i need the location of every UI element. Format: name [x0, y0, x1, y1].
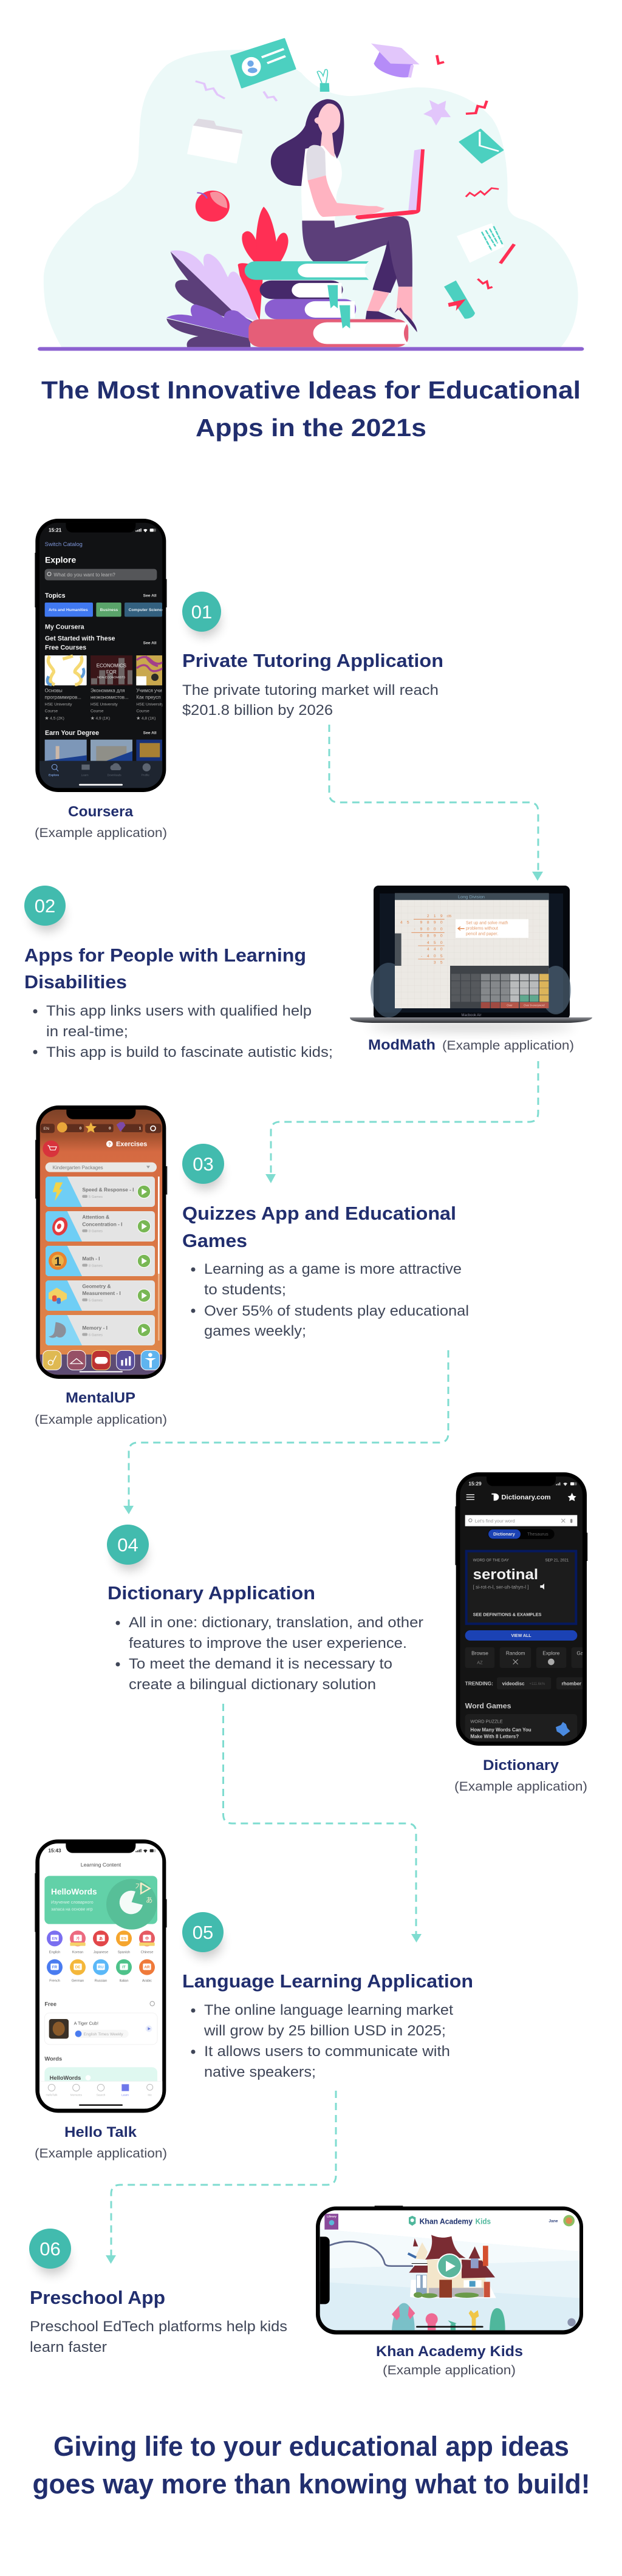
phone: MentalUP: Measurement - I — [82, 1290, 121, 1296]
phone: MentalUP: Memory - I — [82, 1325, 108, 1331]
laptop: ModMath — [350, 886, 592, 1031]
stack of books — [245, 261, 408, 347]
phone: Hello Talk: A Tiger Cub! — [74, 2020, 98, 2026]
phone: Dictionary: Explore — [542, 1650, 560, 1656]
laptop: ModMath: 9 — [434, 921, 436, 925]
phone: MentalUP: Attention & — [82, 1214, 109, 1220]
phone: Hello Talk: Spanish — [118, 1950, 130, 1954]
phone: Coursera: Profile — [142, 773, 149, 776]
icon: paper clip — [317, 69, 329, 92]
phone: Hello Talk: 15:43 — [48, 1848, 61, 1854]
laptop: ModMath: pencil and paper. — [466, 932, 498, 937]
phone: Hello Talk: RU — [98, 1966, 104, 1970]
laptop: ModMath: 9 — [420, 921, 422, 925]
badge 04 — [107, 1525, 149, 1570]
laptop: ModMath: 4 — [400, 921, 403, 925]
caption: Khan Academy Kids — [376, 2343, 523, 2377]
section 03 text: Over 55% of students play educational — [204, 1303, 469, 1319]
title: Apps in the 2021s — [196, 414, 426, 442]
phone: Coursera: Course — [136, 709, 149, 714]
phone: Hello Talk: Chinese — [141, 1950, 153, 1954]
phone: Dictionary: Make With 8 Letters? — [470, 1734, 519, 1739]
caption: MentalUP: MentalUP — [66, 1390, 135, 1406]
phone: Dictionary: Word Games — [465, 1702, 511, 1710]
phone: MentalUP — [35, 1105, 167, 1379]
phone: Coursera: Учимся учи — [136, 688, 162, 693]
badge 01: 01 — [191, 601, 212, 623]
phone: Coursera: What do you want to learn? — [53, 572, 115, 578]
phone: Coursera: Topics — [45, 592, 66, 600]
caption: Coursera: Coursera — [68, 804, 134, 820]
section 05 text: The online language learning market — [204, 2002, 453, 2018]
icon: red check — [437, 55, 444, 64]
phone: Coursera: Free Courses — [45, 644, 86, 651]
background blob — [44, 50, 578, 347]
phone: Dictionary: How Many Words Can You — [470, 1727, 531, 1733]
ground line — [38, 347, 584, 351]
phone: Hello Talk: French — [49, 1980, 60, 1983]
laptop: ModMath: 0 — [420, 934, 422, 938]
caption: MentalUP — [35, 1390, 167, 1427]
laptop: ModMath: 0 — [434, 954, 436, 958]
icon: lilac zigzags — [196, 81, 277, 101]
phone: Coursera: Основы — [45, 688, 63, 693]
woman with laptop — [271, 99, 425, 332]
laptop: ModMath: r35 — [446, 915, 451, 918]
phone: MentalUP: Geometry & — [82, 1283, 111, 1290]
phone: Coursera: Экономика для — [91, 688, 125, 693]
caption: Coursera — [35, 804, 167, 840]
phone: Coursera: See All — [143, 641, 157, 645]
section 06 text — [30, 2287, 287, 2356]
laptop: ModMath: 1 — [434, 914, 436, 918]
laptop: ModMath: 2 — [427, 914, 429, 918]
phone: Hello Talk: Learn — [121, 2094, 129, 2097]
phone: Dictionary: AZ — [477, 1659, 483, 1665]
closing statement: goes way more than knowing what to build! — [33, 2468, 590, 2499]
phone: Coursera: See All — [143, 594, 157, 598]
phone: Hello Talk: Me — [148, 2094, 152, 2097]
phone: Hello Talk: あ — [146, 1896, 152, 1904]
phone: Dictionary: WORD OF THE DAY — [473, 1559, 510, 1563]
caption: Dictionary: Dictionary — [483, 1757, 559, 1774]
phone: MentalUP: 0 — [80, 1127, 82, 1131]
caption: ModMath: (Example application) — [442, 1039, 574, 1053]
phone: MentalUP: 5 Games — [89, 1299, 103, 1302]
phone: Coursera: Explore — [45, 555, 77, 565]
laptop: ModMath: problems without — [466, 927, 498, 931]
section 01 text: Private Tutoring Application — [182, 650, 443, 671]
icon: star — [423, 100, 451, 126]
laptop: ModMath: Over 9-everyword — [524, 1004, 545, 1007]
section 05 text: It allows users to communicate with — [204, 2043, 450, 2060]
section 01 text: The private tutoring market will reach — [182, 682, 439, 699]
phone: Hello Talk: Free — [44, 2001, 56, 2007]
icon: red zigzag low — [478, 279, 493, 288]
phone: Coursera: неэкономистов... — [91, 695, 129, 700]
icon: diploma — [444, 281, 475, 319]
phone: Hello Talk — [35, 1839, 167, 2113]
phone: Coursera: NON-ECONOMISTS — [97, 676, 126, 680]
laptop: ModMath: Set up and solve math — [466, 921, 508, 926]
laptop: ModMath: 4 — [427, 954, 429, 958]
phone: Coursera: Arts and Humanities — [49, 608, 88, 612]
phone: MentalUP: 8 Games — [89, 1264, 103, 1268]
laptop: ModMath: 0 — [440, 941, 443, 945]
badge 03: 03 — [193, 1153, 214, 1175]
laptop: ModMath: 0 — [440, 928, 443, 932]
phone: Hello Talk: 中 — [145, 1935, 149, 1941]
laptop: ModMath: 5 — [407, 921, 409, 925]
phone: Dictionary: rhomber — [562, 1681, 581, 1687]
phone: Dictionary — [455, 1472, 587, 1751]
phone: MentalUP: ? — [108, 1141, 111, 1147]
phone: Dictionary: Thesaurus — [527, 1531, 549, 1537]
section 05 text — [182, 1970, 473, 2080]
laptop: ModMath: - — [414, 928, 415, 932]
laptop: ModMath: 9 — [440, 914, 443, 918]
phone: Hello Talk: Words — [44, 2055, 62, 2062]
section 02 text: Apps for People with Learning — [24, 945, 306, 966]
phone: Hello Talk: HelloWords — [51, 1887, 97, 1896]
caption: ModMath — [368, 1037, 574, 1053]
phone: MentalUP: Concentration - I — [82, 1221, 123, 1227]
phone: Hello Talk: Russian — [95, 1980, 107, 1983]
phone: Hello Talk: HelloWords — [50, 2075, 81, 2081]
arrow 01 to 02 — [329, 725, 543, 881]
phone: Coursera: Explore — [49, 773, 59, 776]
phone: Hello Talk: Изучение словарного — [51, 1901, 94, 1905]
phone: MentalUP: Kindergarten Packages — [53, 1165, 103, 1170]
section 05 text: will grow by 25 billion USD in 2025; — [203, 2023, 446, 2039]
phone: Coursera: Learn — [81, 773, 89, 776]
section 04 text: All in one: dictionary, translation, and other — [129, 1614, 423, 1631]
section 01 text — [182, 650, 443, 719]
phone: Coursera: Course — [45, 709, 58, 714]
phone: Dictionary: Dictionary.com — [501, 1494, 551, 1502]
phone: Dictionary: Dictionary — [493, 1531, 516, 1537]
phone: Dictionary: Let's find your word — [475, 1519, 515, 1524]
laptop: ModMath: - — [421, 954, 422, 958]
phone: Dictionary: VIEW ALL — [511, 1634, 531, 1638]
phone: Coursera: Downloads — [108, 773, 121, 776]
section 03 text: games weekly; — [204, 1323, 306, 1339]
caption: Dictionary — [454, 1757, 587, 1794]
phone: Hello Talk: FR — [52, 1966, 58, 1970]
icon: folder — [187, 118, 242, 163]
section 04 text: To meet the demand it is necessary to — [129, 1656, 392, 1672]
phone: MentalUP: 1 — [54, 1254, 61, 1268]
section 02 text: Disabilities — [24, 971, 127, 992]
badge 05: 05 — [193, 1922, 213, 1943]
phone: Khan Academy Kids — [316, 2205, 583, 2334]
phone: Coursera: FOR — [106, 669, 117, 675]
laptop: ModMath: 5 — [440, 954, 443, 958]
plants — [166, 207, 289, 347]
arrow 03 to 04 — [123, 1350, 448, 1514]
phone: Dictionary: Random — [506, 1650, 525, 1656]
closing statement — [33, 2431, 590, 2499]
phone: Coursera: HSE University — [91, 703, 118, 707]
phone: Hello Talk: AR — [144, 1966, 150, 1970]
laptop: ModMath: 0 — [440, 921, 443, 925]
phone: Coursera: See All — [143, 731, 157, 735]
phone: Hello Talk: English Times Weekly — [84, 2032, 123, 2037]
phone: Dictionary: SEE DEFINITIONS & EXAMPLES — [473, 1612, 542, 1618]
phone: Coursera: Earn Your Degree — [45, 729, 99, 737]
closing statement: Giving life to your educational app ideas — [53, 2431, 569, 2462]
section 05 text: Language Learning Application — [182, 1970, 473, 1992]
section 06 text: Preschool EdTech platforms help kids — [30, 2318, 287, 2335]
phone: Khan Academy Kids: Kids — [476, 2216, 491, 2226]
caption: Coursera: (Example application) — [35, 826, 167, 840]
phone: Coursera: программиров... — [45, 695, 81, 700]
section 03 text: to students; — [204, 1282, 286, 1298]
caption: Khan Academy Kids: (Example application) — [383, 2363, 516, 2377]
laptop: ModMath: 8 — [427, 921, 429, 925]
phone: Hello Talk: English — [49, 1950, 60, 1954]
phone: Coursera: Switch Catalog — [45, 541, 83, 547]
phone: Coursera: Course — [91, 709, 104, 714]
badge 03 — [182, 1144, 224, 1189]
laptop: ModMath: Long Division — [458, 894, 485, 900]
phone: Hello Talk: 가 — [135, 1882, 142, 1891]
caption: Dictionary: (Example application) — [454, 1780, 587, 1794]
phone: Hello Talk: ES — [121, 1936, 126, 1941]
laptop: ModMath: 0 — [440, 934, 443, 938]
arrow 02 to 03 — [265, 1061, 538, 1183]
laptop: ModMath: Over — [507, 1004, 513, 1007]
phone: MentalUP: EN — [44, 1127, 49, 1131]
phone: Hello Talk: HelloTalk — [46, 2094, 58, 2097]
section 04 text: create a bilingual dictionary solution — [129, 1676, 376, 1693]
badge 02 — [24, 886, 66, 931]
icon: id card — [231, 39, 295, 87]
phone: Hello Talk: Search — [97, 2094, 106, 2097]
icon: red zigzag middle — [466, 188, 499, 197]
phone: Dictionary: Ga — [576, 1650, 584, 1656]
phone: Coursera: HSE University — [45, 703, 72, 707]
phone: Hello Talk: German — [72, 1980, 84, 1983]
caption: Hello Talk: (Example application) — [35, 2147, 167, 2161]
phone: MentalUP: 5 Games — [89, 1195, 103, 1199]
section 04 text: Dictionary Application — [108, 1582, 315, 1604]
phone: Coursera: Computer Science — [129, 608, 164, 612]
phone: Dictionary: Browse — [471, 1650, 488, 1656]
phone: Hello Talk: Italian — [119, 1980, 129, 1983]
icon: paper sheet with pencil — [457, 223, 514, 264]
phone: Coursera: ECONOMICS — [97, 663, 126, 668]
caption: Hello Talk — [35, 2124, 167, 2161]
section 06 text: learn faster — [30, 2339, 107, 2356]
laptop: ModMath: 4 — [427, 948, 429, 952]
laptop: ModMath: 4 — [434, 948, 436, 952]
section 02 text: This app is build to fascinate autistic kids; — [46, 1044, 333, 1061]
title: The Most Innovative Ideas for Educational — [41, 376, 581, 404]
phone: Coursera: HSE University — [136, 703, 164, 707]
phone: Dictionary: 15:29 — [468, 1481, 482, 1487]
phone: Hello Talk: Learning Content — [81, 1862, 121, 1868]
section 03 text: Quizzes App and Educational — [182, 1203, 456, 1224]
arrow 05 to 06 — [106, 2091, 336, 2264]
icon: apple — [196, 191, 230, 222]
phone: Hello Talk: запаса на основе игр — [51, 1908, 93, 1912]
phone: Coursera: 15:21 — [49, 527, 62, 533]
caption: ModMath: ModMath — [368, 1037, 436, 1053]
phone: Khan Academy Kids: Jane — [549, 2219, 558, 2224]
phone: Hello Talk: Arabic — [142, 1980, 152, 1983]
phone: Coursera: Как преусп — [136, 695, 160, 700]
laptop: ModMath: 5 — [440, 961, 443, 965]
section 02 text — [24, 945, 333, 1061]
laptop: ModMath: Macbook Air — [461, 1014, 482, 1017]
laptop: ModMath: 9 — [434, 934, 436, 938]
section 05 text: native speakers; — [204, 2064, 316, 2080]
phone: Coursera: ★ 4,5 (2K) — [45, 716, 64, 720]
phone: Hello Talk: 가 — [76, 1935, 80, 1941]
laptop: ModMath: 8 — [427, 934, 429, 938]
icon: envelope — [460, 129, 503, 163]
phone: MentalUP: 1 — [139, 1127, 142, 1131]
phone: Dictionary: [ si-rot-n-l, ser-uh-tahyn-l ] — [473, 1584, 529, 1590]
phone: Khan Academy Kids: Khan Academy — [420, 2216, 473, 2226]
phone: Dictionary: videodisc — [502, 1681, 525, 1687]
phone: Coursera: ★ 4,8 (1K) — [136, 716, 156, 720]
badge 06: 06 — [39, 2238, 61, 2260]
section 03 text: Learning as a game is more attractive — [204, 1261, 462, 1277]
title — [41, 376, 581, 442]
phone: Coursera: Get Started with These — [45, 635, 115, 643]
laptop: ModMath: 5 — [434, 941, 436, 945]
phone: Hello Talk: EN — [52, 1936, 58, 1941]
phone: MentalUP: 6 Games — [89, 1333, 103, 1337]
phone: Hello Talk: Korean — [72, 1950, 83, 1954]
badge 02: 02 — [35, 895, 55, 917]
laptop: ModMath: 3 — [434, 961, 436, 965]
section 03 text — [182, 1203, 469, 1339]
badge 04: 04 — [117, 1534, 138, 1556]
caption: Khan Academy Kids: Khan Academy Kids — [376, 2343, 523, 2360]
phone: Coursera: Business — [100, 608, 118, 612]
phone: Dictionary: WORD PUZZLE — [470, 1719, 503, 1724]
icon: graduation cap — [371, 43, 420, 78]
phone: Coursera: My Coursera — [45, 623, 84, 630]
laptop: ModMath: 0 — [427, 928, 429, 932]
phone: Dictionary: SEP 21, 2021 — [545, 1559, 569, 1563]
section 04 text — [108, 1582, 423, 1693]
laptop: ModMath: 9 — [420, 928, 422, 932]
phone: Hello Talk: DE — [75, 1966, 80, 1970]
section 01 text: $201.8 billion by 2026 — [182, 702, 333, 719]
phone: Coursera: ★ 4,9 (1K) — [91, 716, 110, 720]
badge 01 — [182, 592, 221, 637]
phone: Dictionary: serotinal — [473, 1566, 538, 1583]
caption: Hello Talk: Hello Talk — [64, 2124, 137, 2140]
phone: Hello Talk: Moments — [70, 2094, 83, 2097]
phone: MentalUP: Speed & Response - I — [82, 1186, 134, 1192]
phone: Hello Talk: IT — [122, 1966, 126, 1970]
phone: MentalUP: 8 Games — [89, 1230, 103, 1234]
phone: Dictionary: +111.6k% — [529, 1683, 545, 1686]
phone: Coursera — [35, 519, 167, 792]
phone: Khan Academy Kids: Library — [327, 2215, 337, 2218]
phone: MentalUP: Math - I — [82, 1256, 100, 1262]
caption: MentalUP: (Example application) — [35, 1413, 167, 1427]
phone: MentalUP: 0 — [109, 1127, 111, 1131]
icon: red zigzag top — [466, 101, 487, 114]
section 03 text: Games — [182, 1230, 247, 1251]
section 06 text: Preschool App — [30, 2287, 165, 2308]
arrow 04 to 05 — [224, 1704, 422, 1942]
badge 06 — [29, 2229, 71, 2274]
badge 05 — [182, 1912, 224, 1958]
phone: MentalUP: Exercises — [116, 1141, 147, 1148]
section 02 text: This app links users with qualified help — [46, 1003, 312, 1019]
laptop: ModMath: 4 — [427, 941, 429, 945]
laptop: ModMath: 0 — [440, 948, 443, 952]
hero illustration — [38, 39, 584, 351]
phone: Hello Talk: あ — [99, 1936, 103, 1941]
phone: Dictionary: TRENDING: — [465, 1681, 493, 1687]
phone: Hello Talk: Japanese — [94, 1950, 108, 1954]
section 04 text: features to improve the user experience. — [129, 1635, 407, 1652]
section 02 text: in real-time; — [46, 1023, 128, 1040]
laptop: ModMath: 0 — [434, 928, 436, 932]
